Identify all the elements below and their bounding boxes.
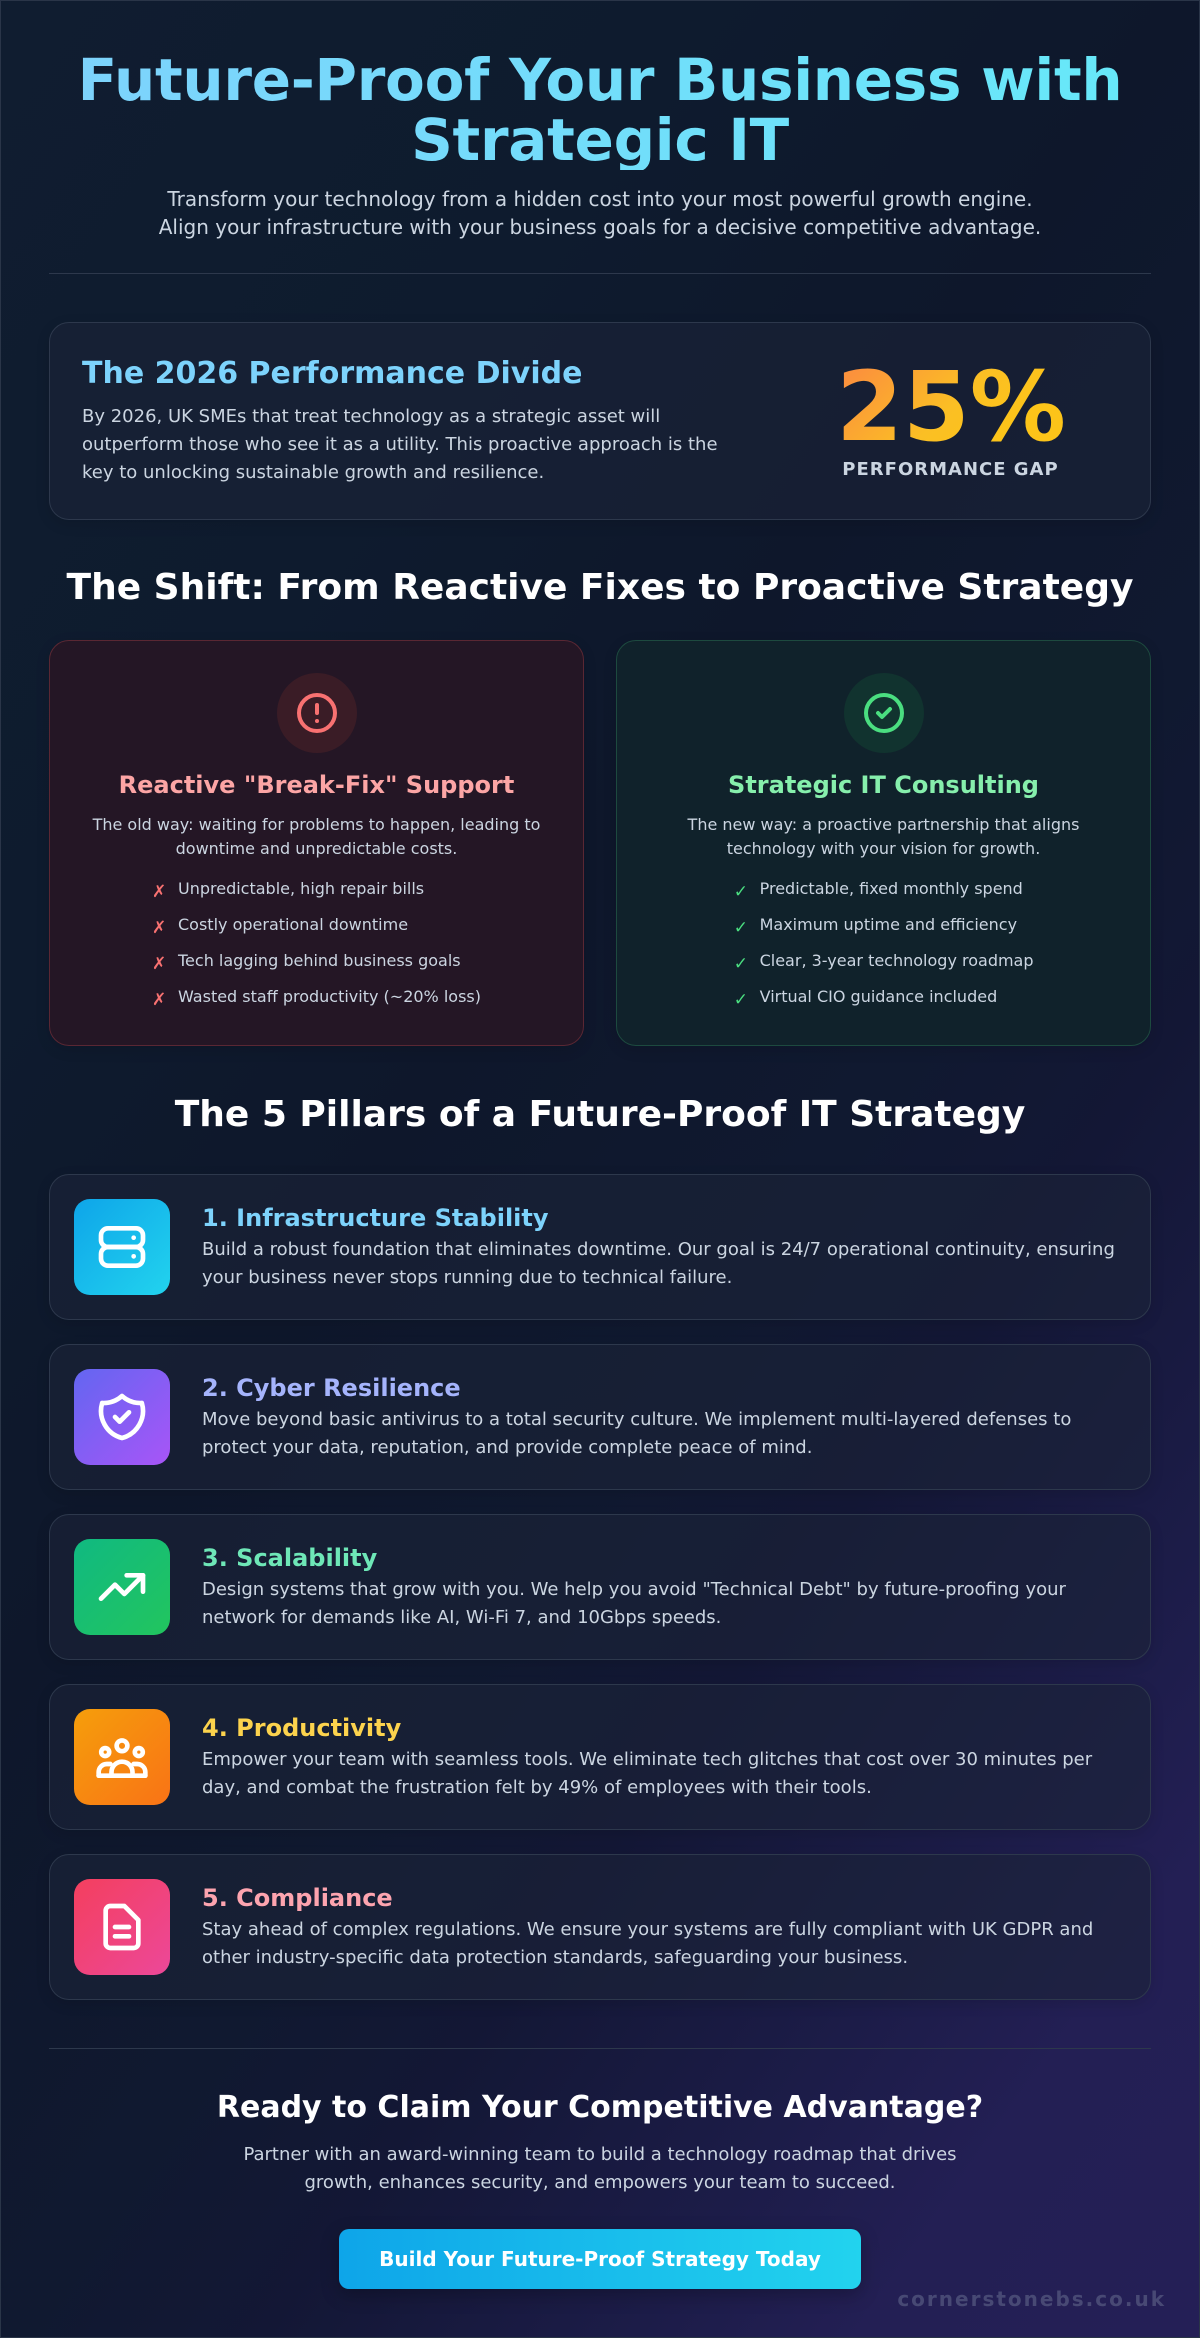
stat: 25%: 25% [836,351,1066,463]
list: reactive drawbacks: Costly operational downtime [178,914,408,934]
text: pillar 1: Build a robust foundation that eliminates downtime. Our goal is 24/7 operational continuity, ensuring [202,1238,1115,1260]
text: performance divide description [82,406,718,483]
text: call to action: growth, enhances security, and empowers your team to succeed. [304,2172,896,2192]
list: strategic benefits: ✓ [734,918,748,938]
heading: pillar 5: 5. Compliance [202,1884,393,1912]
subtitle: Align your infrastructure with your business goals for a decisive competitive advantage. [159,215,1041,239]
list: reactive drawbacks: ✗ [152,990,166,1010]
heading: reactive: Reactive "Break-Fix" Support [119,771,514,799]
list: reactive drawbacks: Unpredictable, high repair bills [178,878,424,898]
heading: the shift: The Shift: From Reactive Fixes to Proactive Strategy [67,566,1133,608]
stat label: PERFORMANCE GAP [842,459,1059,480]
text: pillar 5: Stay ahead of complex regulations. We ensure your systems are fully compliant with UK GDPR and [202,1918,1093,1940]
text: pillar 5 [202,1918,1093,1968]
heading: strategic: Strategic IT Consulting [728,771,1039,799]
text: performance divide description: key to unlocking sustainable growth and resilience. [82,462,544,483]
text: strategic description: technology with your vision for growth. [727,839,1040,858]
text: pillar 4: day, and combat the frustration felt by 49% of employees with their tools. [202,1776,872,1798]
list: reactive drawbacks: Tech lagging behind business goals [178,950,461,970]
title: Future-Proof Your Business with [78,46,1122,114]
text: strategic description: The new way: a proactive partnership that aligns [688,815,1079,834]
text: pillar 3 [202,1578,1066,1628]
list: strategic benefits: ✓ [734,954,748,974]
text: pillar 3: network for demands like AI, Wi-Fi 7, and 10Gbps speeds. [202,1606,721,1628]
list: reactive drawbacks: ✗ [152,954,166,974]
panel: strategic consulting [616,640,1151,1046]
text: pillar 1: your business never stops running due to technical failure. [202,1266,732,1288]
heading: pillar 4: 4. Productivity [202,1714,401,1742]
text: reactive description: downtime and unpredictable costs. [176,839,457,858]
button: build strategy: Build Your Future-Proof Strategy Today [379,2247,821,2271]
subtitle [159,187,1041,239]
icon: check circle [844,673,924,753]
heading: five pillars: The 5 Pillars of a Future-Proof IT Strategy [175,1094,1025,1134]
panel: pillar 3 scalability [49,1514,1151,1660]
text: strategic description [687,815,1079,858]
heading: pillar 1: 1. Infrastructure Stability [202,1204,549,1232]
text: reactive description: The old way: waiting for problems to happen, leading to [93,815,540,834]
text: reactive description [92,815,540,858]
text: pillar 4: Empower your team with seamless tools. We eliminate tech glitches that cost over 30 minutes per [202,1748,1092,1770]
heading: pillar 3: 3. Scalability [202,1544,377,1572]
list: strategic benefits: Maximum uptime and efficiency [760,914,1017,934]
list: strategic benefits: Virtual CIO guidance included [760,986,997,1006]
panel: performance divide [49,322,1151,520]
icon: trending up [74,1539,170,1635]
text: pillar 2: Move beyond basic antivirus to a total security culture. We implement multi-layered defenses to [202,1408,1071,1430]
list: strategic benefits [734,878,1034,1010]
list: reactive drawbacks: ✗ [152,882,166,902]
text: pillar 3: Design systems that grow with you. We help you avoid "Technical Debt" by future-proofing your [202,1578,1066,1600]
button: build strategy [339,2229,861,2289]
icon: team [74,1709,170,1805]
text: pillar 2: protect your data, reputation, and provide complete peace of mind. [202,1436,812,1458]
list: strategic benefits: Clear, 3-year technology roadmap [760,950,1034,970]
footer url: cornerstonebs.co.uk [897,2287,1166,2311]
subtitle: Transform your technology from a hidden cost into your most powerful growth engine. [167,187,1033,211]
text: call to action [243,2144,957,2192]
list: reactive drawbacks: ✗ [152,918,166,938]
list: reactive drawbacks [152,878,481,1010]
icon: alert circle [276,673,356,753]
text: pillar 2 [202,1408,1071,1458]
heading: performance divide: The 2026 Performance Divide [82,356,582,391]
text: pillar 4 [202,1748,1092,1798]
title: Strategic IT [411,106,789,174]
text: pillar 1 [202,1238,1115,1288]
icon: shield check [74,1369,170,1465]
text: performance divide description: By 2026, UK SMEs that treat technology as a strategic asset will [82,406,660,427]
panel: pillar 1 infrastructure [49,1174,1151,1320]
icon: document [74,1879,170,1975]
list: strategic benefits: ✓ [734,882,748,902]
list: strategic benefits: Predictable, fixed monthly spend [760,878,1023,898]
title [78,46,1122,174]
text: call to action: Partner with an award-winning team to build a technology roadmap that drives [243,2144,957,2164]
heading: call to action: Ready to Claim Your Competitive Advantage? [217,2090,983,2125]
list: strategic benefits: ✓ [734,990,748,1010]
text: performance divide description: outperform those who see it as a utility. This proactive approach is the [82,434,718,455]
panel: pillar 2 cyber [49,1344,1151,1490]
panel: pillar 4 productivity [49,1684,1151,1830]
icon: server [74,1199,170,1295]
panel: reactive break-fix [49,640,584,1046]
text: pillar 5: other industry-specific data protection standards, safeguarding your business. [202,1946,908,1968]
panel: pillar 5 compliance [49,1854,1151,2000]
list: reactive drawbacks: Wasted staff productivity (~20% loss) [178,986,481,1006]
heading: pillar 2: 2. Cyber Resilience [202,1374,461,1402]
